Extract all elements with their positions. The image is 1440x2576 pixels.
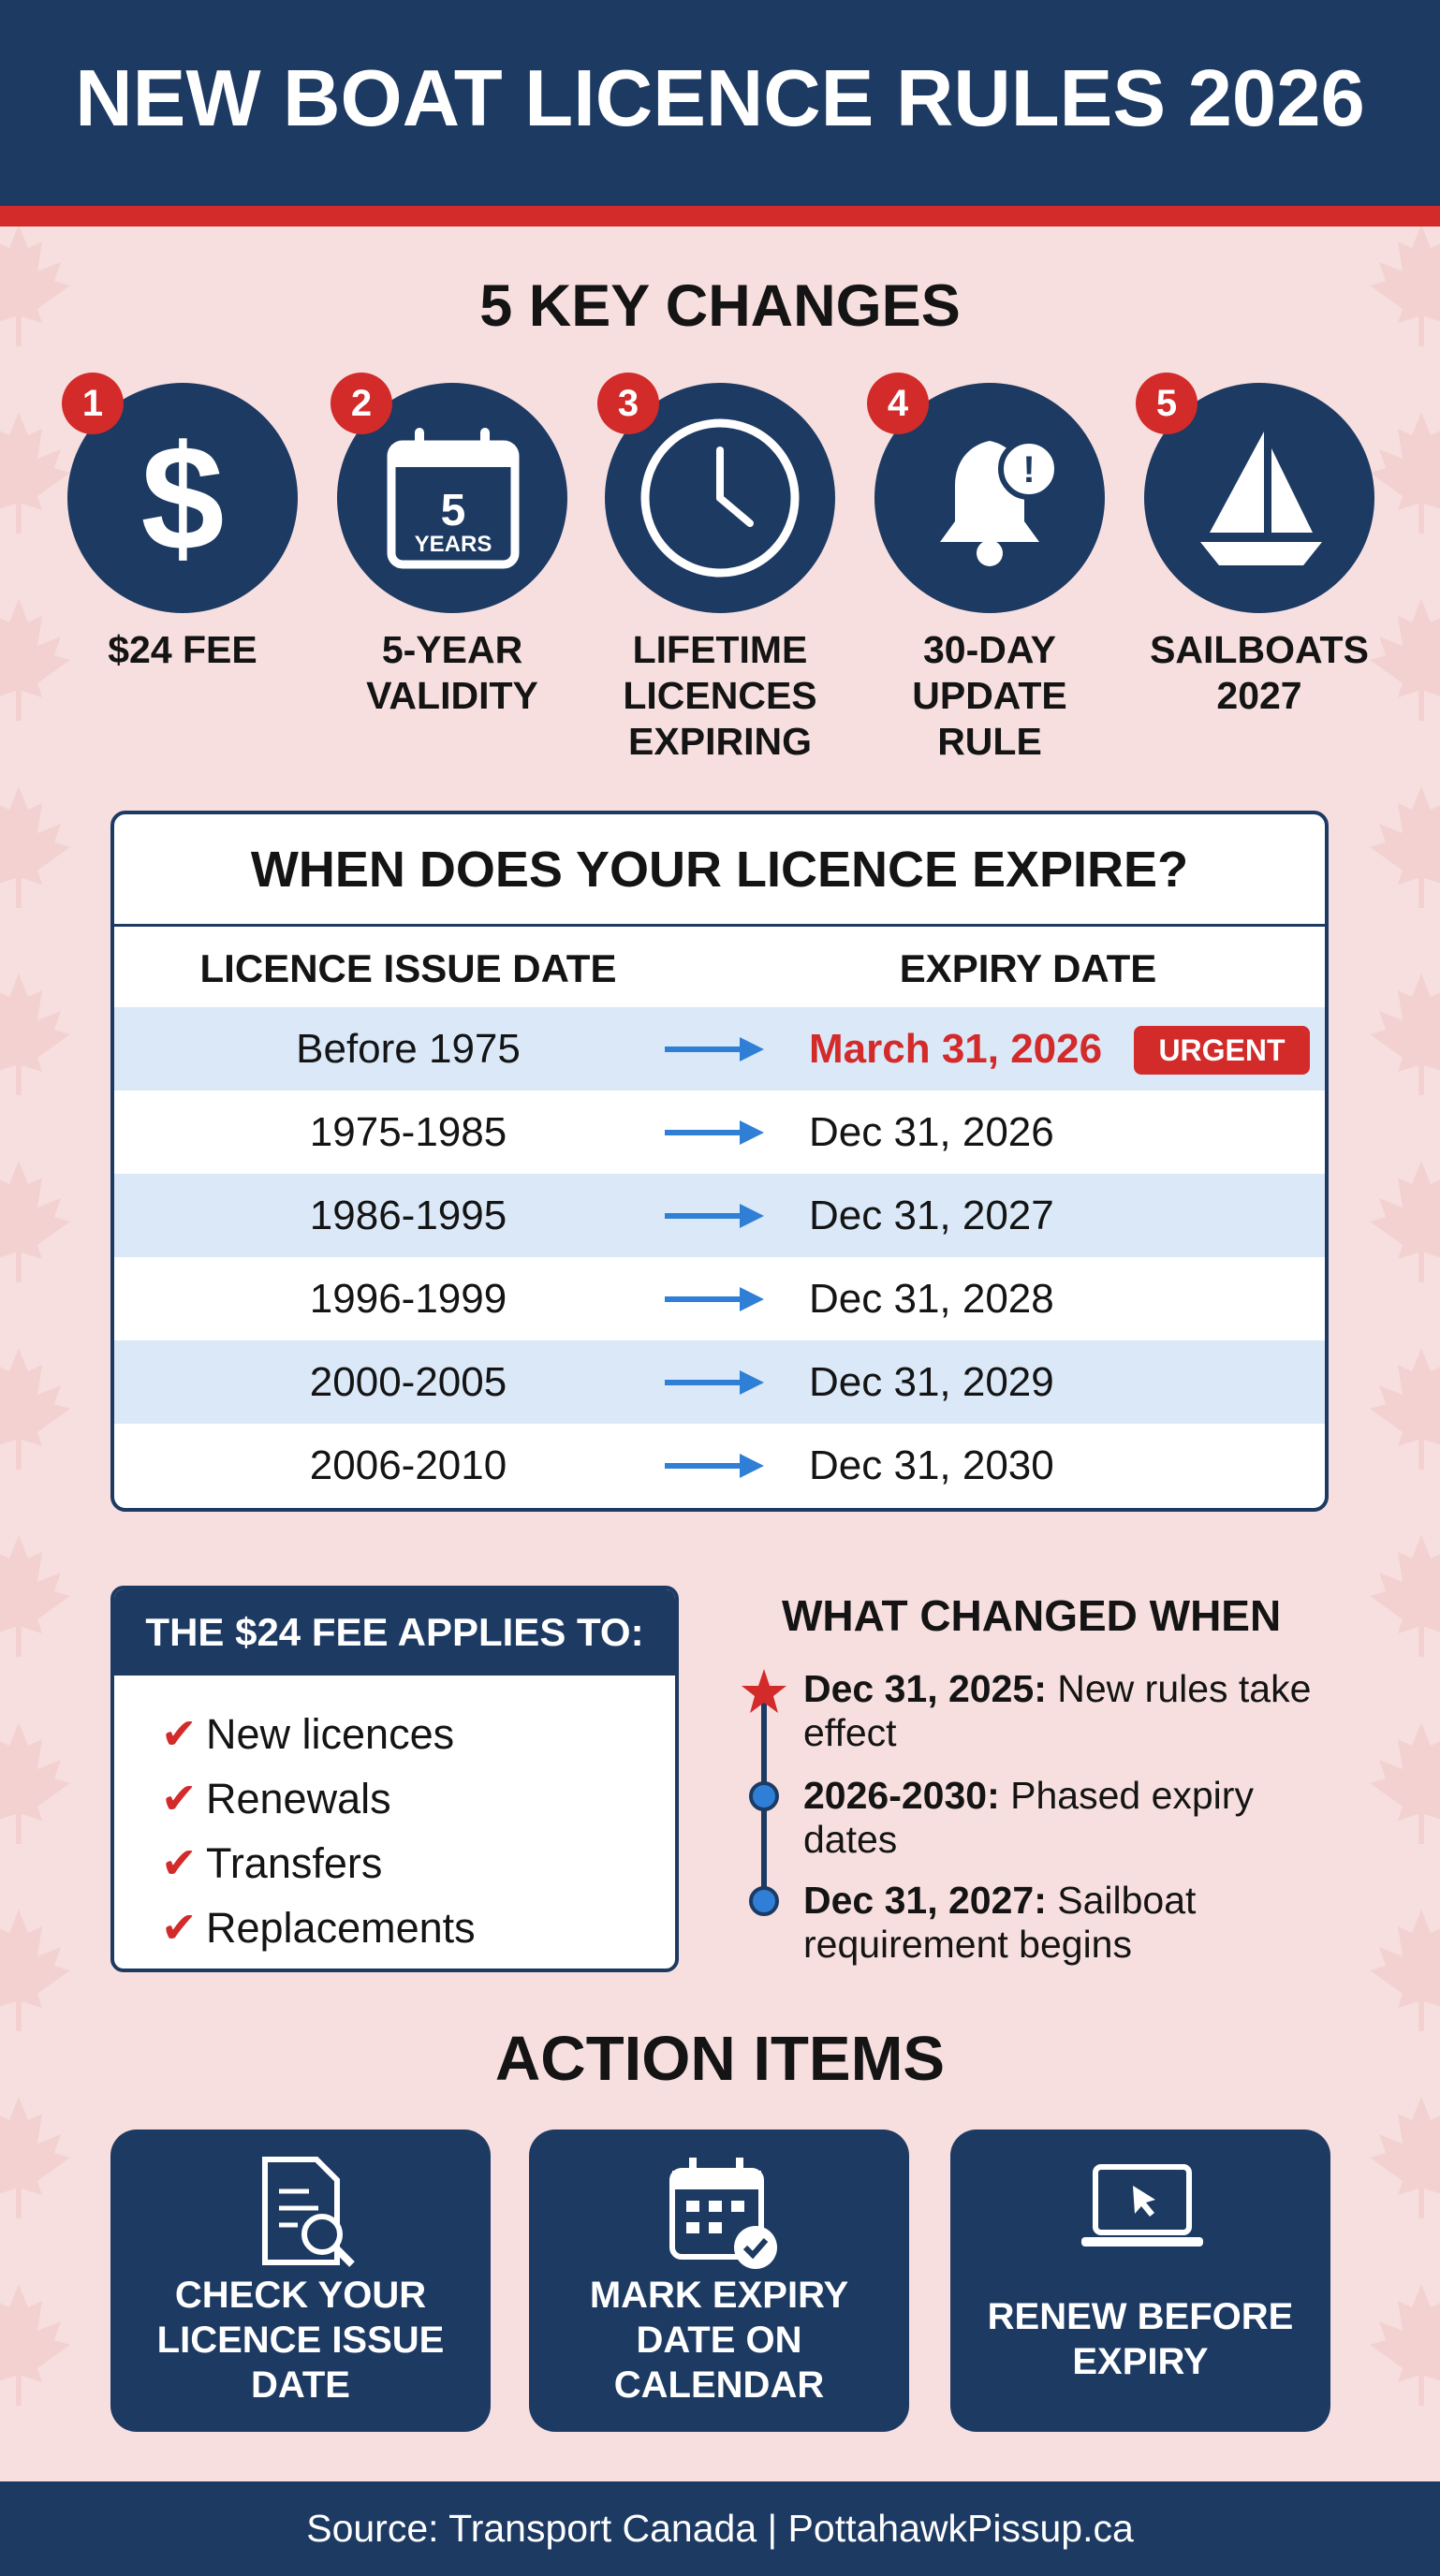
fee list: Replacements [206,1904,476,1952]
card: check licence: CHECK YOUR [175,2275,426,2316]
text: RULE [937,720,1042,763]
fee list: ✔ [161,1774,198,1822]
row: 1975-1985: Dec 31, 2026 [809,1109,1054,1155]
row: 1996-1999: 1996-1999 [310,1276,507,1322]
labels: $24 FEE [108,628,257,671]
number badges: 1 [82,383,103,424]
text: EXPIRING [628,720,812,763]
number badges [62,373,124,434]
heading: 5 key changes: 5 KEY CHANGES [479,273,961,339]
timeline entries: Dec 31, 2025: New rules take effect [803,1667,1311,1754]
text: VALIDITY [366,674,538,717]
panel: expiry table [110,811,1329,1512]
text: 2027 [1216,674,1302,717]
panel: what changed when: 2026-2030: Phased expiry dates [803,1774,1254,1861]
icon: calendar 5 years: YEARS [415,532,492,557]
panel: what changed when [742,1591,1311,1966]
row: before 1975: March 31, 2026 [809,1026,1102,1072]
icon: sailboat [1144,383,1374,613]
footer [0,2481,1440,2576]
row: 1996-1999: Dec 31, 2028 [809,1276,1054,1322]
row: before 1975: Before 1975 [296,1026,521,1072]
row: 1975-1985: 1975-1985 [310,1109,507,1155]
text: 2 [351,383,372,424]
row: 1975-1985 [310,1109,1054,1155]
icon: clock [605,383,835,613]
icon: calendar 5 years: 5 [441,486,465,535]
text: 5-YEAR [382,628,522,671]
row: 1996-1999 [310,1276,1054,1322]
fee list: ✔ [161,1903,198,1952]
table header [200,946,1156,990]
fee header [114,1589,675,1676]
card: renew [950,2130,1330,2432]
card: renew: EXPIRY [1072,2341,1209,2382]
fee list [161,1709,476,1952]
card: check licence: DATE [251,2364,350,2406]
text: 3 [618,383,639,424]
card: renew: RENEW BEFORE [988,2296,1293,2337]
card: check licence [110,2130,491,2432]
fee list: New licences [206,1710,454,1758]
table header: LICENCE ISSUE DATE [200,946,616,990]
text: 4 [888,383,908,424]
table title: WHEN DOES YOUR LICENCE EXPIRE? [251,842,1188,898]
timeline graphic [742,1669,786,1916]
text: UPDATE [912,674,1067,717]
text: LIFETIME [633,628,807,671]
card: mark expiry: CALENDAR [614,2364,824,2406]
row: 2006-2010: 2006-2010 [310,1442,507,1488]
text: 5 [1156,383,1177,424]
table header: EXPIRY DATE [900,946,1156,990]
panel: fee applies to [110,1586,679,1972]
card: mark expiry: MARK EXPIRY [590,2275,848,2316]
heading: action items: ACTION ITEMS [495,2024,945,2094]
text: 30-DAY [923,628,1056,671]
panel: what changed when: Dec 31, 2027: Sailboat requirement begins [803,1879,1196,1966]
row: 2006-2010 [310,1442,1054,1488]
card: mark expiry [529,2130,909,2432]
row: before 1975 [114,1007,1325,1090]
text: SAILBOATS [1150,628,1369,671]
row: 2000-2005 [114,1340,1325,1424]
timeline heading: WHAT CHANGED WHEN [782,1591,1281,1640]
icon: calendar 5 years [337,383,567,613]
text: LICENCES [623,674,817,717]
icon: bell alert [874,383,1105,613]
title: NEW BOAT LICENCE RULES 2026 [75,54,1365,143]
row: before 1975: URGENT [1158,1033,1286,1067]
row: 1986-1995 [114,1174,1325,1257]
footer: Source: Transport Canada | PottahawkPissup.ca [306,2507,1134,2550]
row: 2000-2005: 2000-2005 [310,1359,507,1405]
card: mark expiry: DATE ON [636,2320,802,2361]
icon: dollar [67,383,298,613]
fee list: Transfers [206,1839,382,1887]
card: check licence: LICENCE ISSUE [157,2320,444,2361]
fee header: THE $24 FEE APPLIES TO: [145,1610,644,1654]
icon: dollar: $ [140,414,224,581]
fee list: Renewals [206,1775,391,1822]
header [0,0,1440,227]
row: 1986-1995: Dec 31, 2027 [809,1193,1054,1238]
row: 2006-2010: Dec 31, 2030 [809,1442,1054,1488]
fee list: ✔ [161,1709,198,1758]
row: 1986-1995: 1986-1995 [310,1193,507,1238]
fee list: ✔ [161,1838,198,1887]
row: 2000-2005: Dec 31, 2029 [809,1359,1054,1405]
icon: bell alert: ! [1022,449,1036,490]
